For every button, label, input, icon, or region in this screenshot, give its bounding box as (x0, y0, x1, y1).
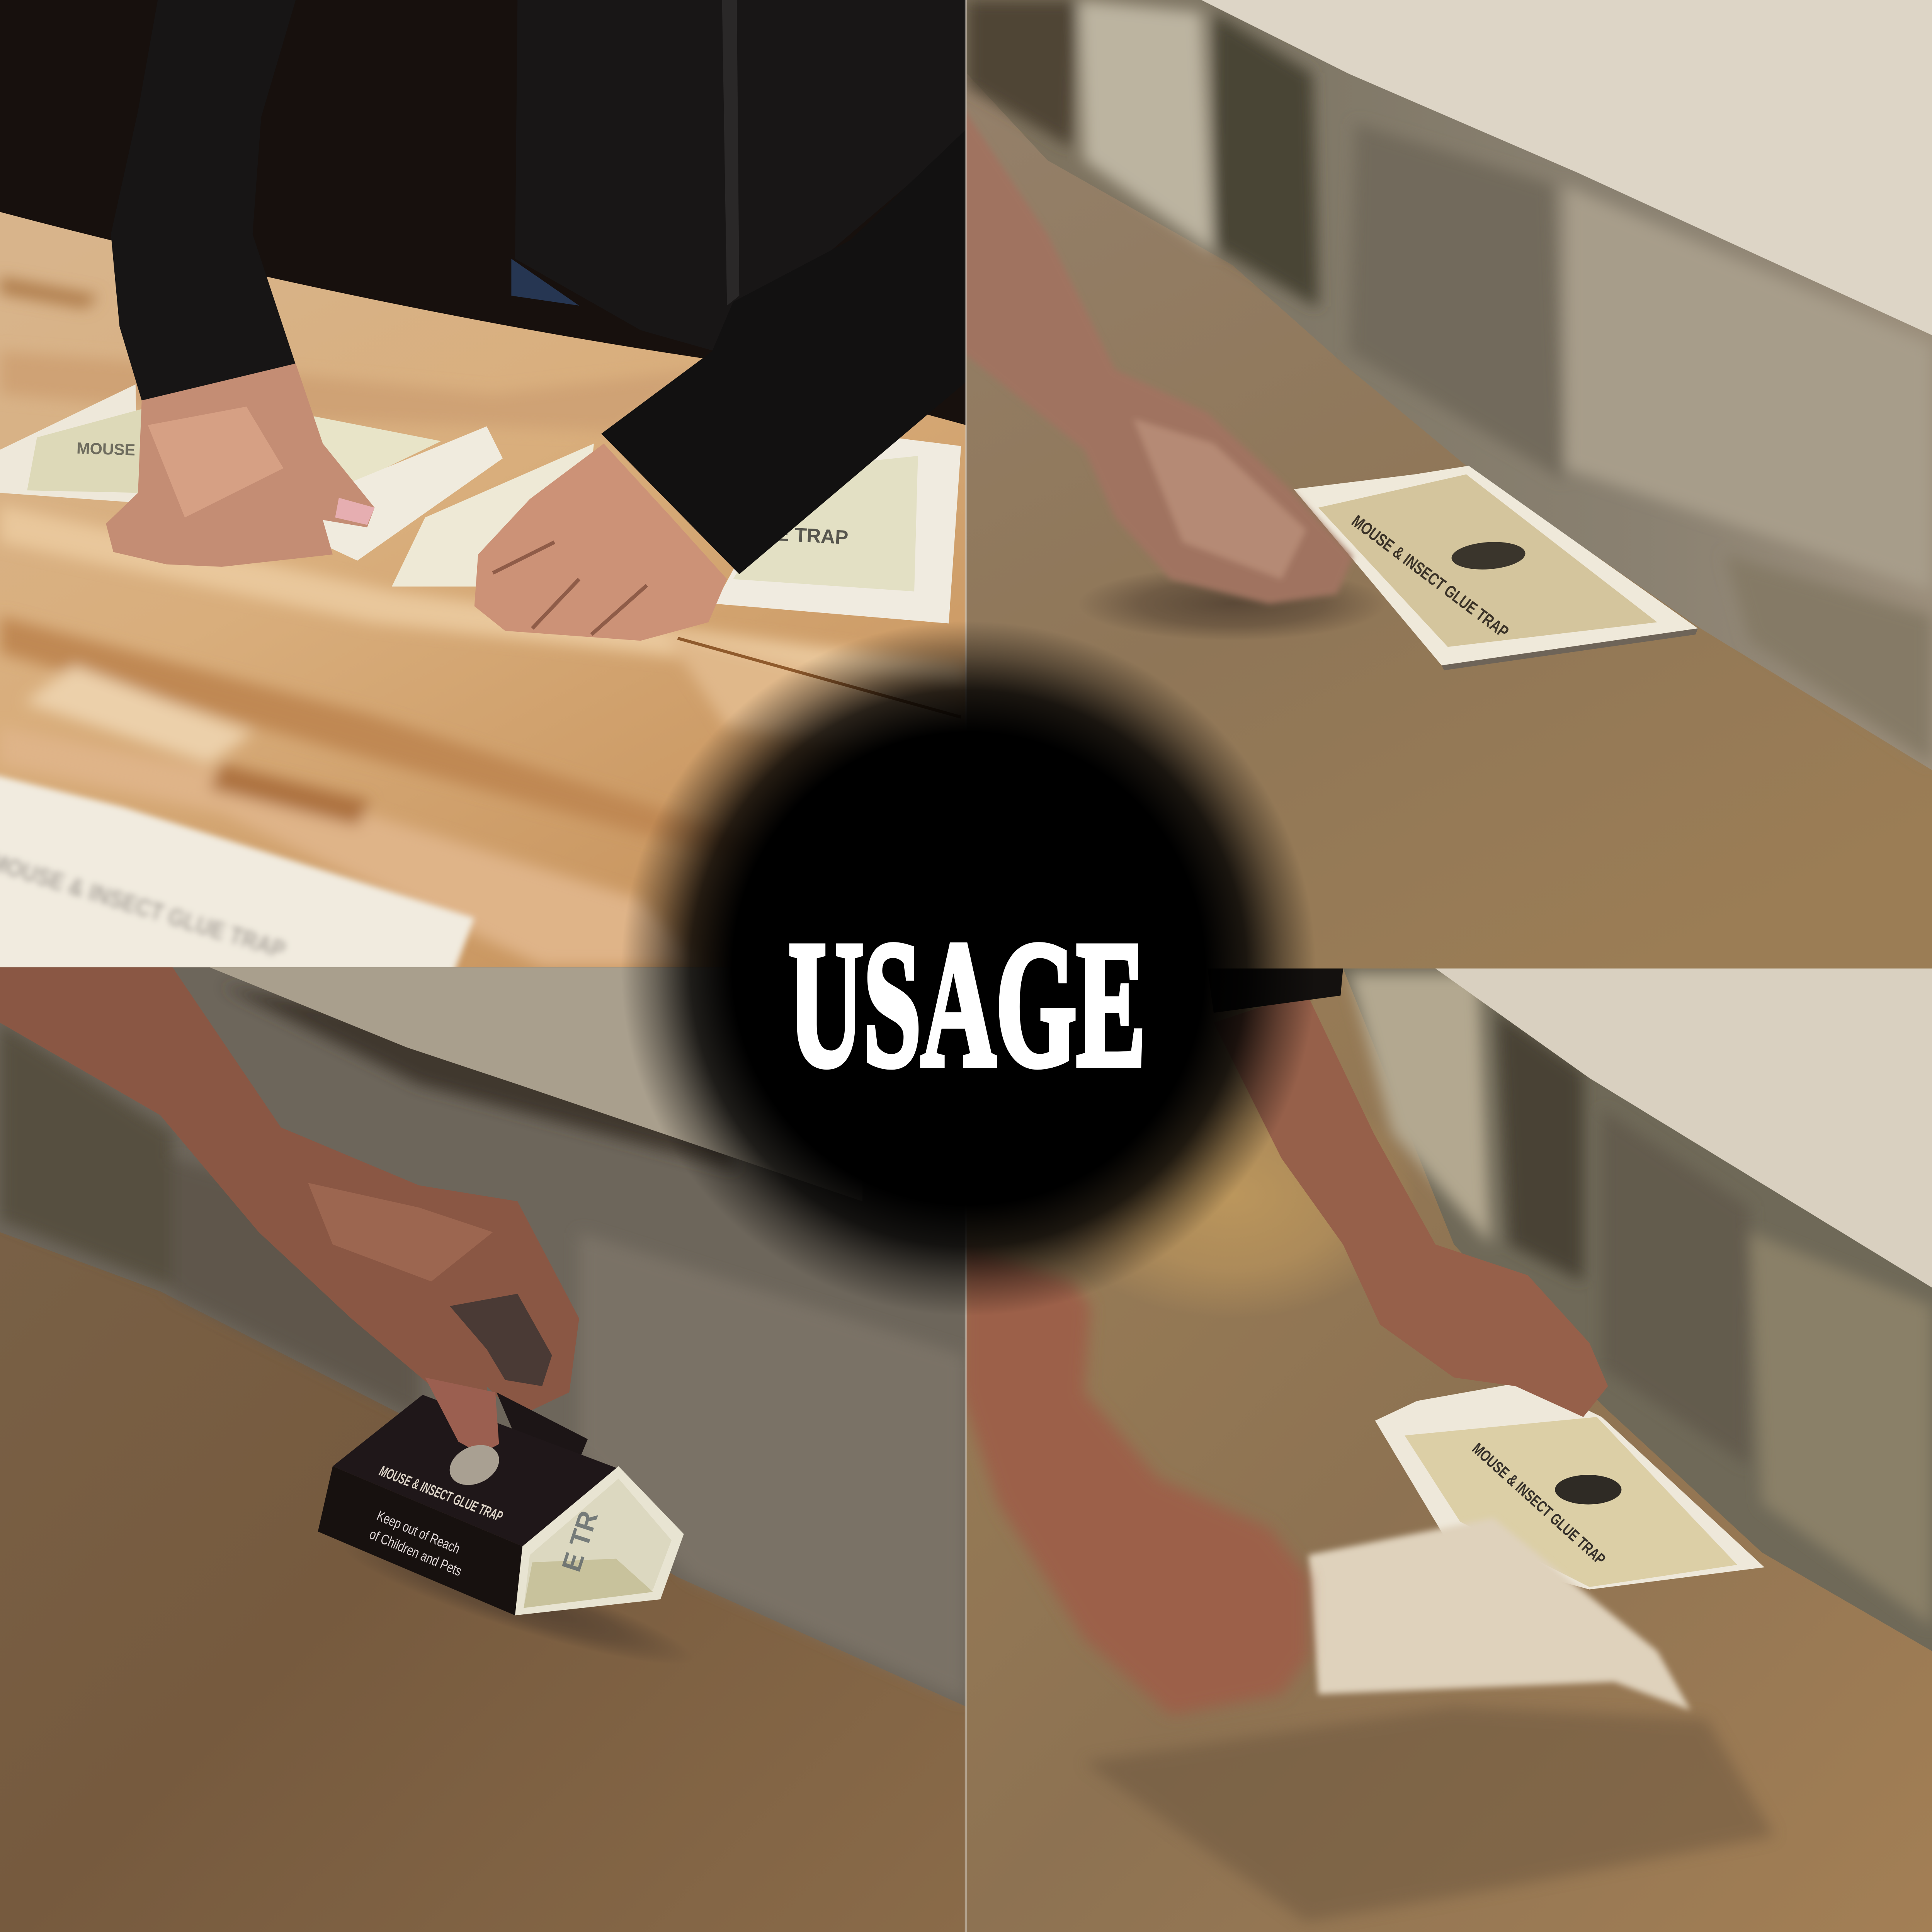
arm and hand (0, 967, 579, 1451)
box warning line two: of Children and Pets (367, 1526, 464, 1579)
long floor shadow (1084, 1706, 1774, 1922)
floor shadow (333, 1519, 702, 1685)
painted wall upper (1435, 968, 1932, 1287)
concrete block tones (967, 0, 1932, 764)
paper trap left (0, 384, 503, 561)
paper foreground (0, 774, 474, 973)
hands (106, 364, 727, 641)
wood grain (0, 277, 966, 966)
thumb (425, 1378, 499, 1454)
logo (1555, 1475, 1621, 1504)
glue trap on floor (1294, 466, 1698, 670)
paper trap right: UE TRAP (761, 522, 849, 548)
background room (0, 0, 966, 425)
panel: folding traps on workbench (0, 0, 966, 973)
paper trap right (392, 434, 961, 624)
black sleeve (1208, 968, 1343, 1013)
hand and arm (961, 105, 1353, 604)
warm floor glow (1047, 1072, 1417, 1318)
blurred near arm (961, 1245, 1308, 1715)
panel: placing trap along wall (961, 0, 1932, 970)
box warning line one: Keep out of Reach (374, 1507, 463, 1557)
concrete wall (0, 967, 966, 1706)
folded trap box (318, 1378, 684, 1615)
divider line (965, 0, 967, 1932)
central black vignette (621, 621, 1316, 1316)
floor (966, 0, 1932, 970)
concrete block tones (0, 986, 965, 1701)
concrete wall (967, 0, 1932, 770)
table dark grain line (678, 638, 961, 717)
panel: folded box trap at wall (0, 967, 966, 1932)
inner print: E TR (556, 1507, 604, 1575)
concrete block tones (1349, 973, 1932, 1626)
concrete wall (1343, 968, 1932, 1651)
wooden table (0, 212, 966, 968)
logo (1451, 539, 1526, 572)
box logo (443, 1437, 506, 1493)
floor shadow (1078, 567, 1386, 641)
trap label: MOUSE & INSECT GLUE TRAP (1469, 1439, 1609, 1568)
title: USAGE (789, 905, 1146, 1104)
floor (966, 968, 1932, 1932)
arm and hand at wall (1214, 992, 1608, 1417)
painted wall upper (209, 967, 862, 1201)
trap with print (1375, 1381, 1764, 1590)
panel: peeling trap cover near wall (961, 968, 1932, 1932)
painted wall upper (1201, 0, 1932, 335)
box heading: MOUSE & INSECT GLUE TRAP (377, 1463, 505, 1525)
jacket and sleeves (111, 0, 966, 574)
paper trap left: MOUSE (76, 439, 136, 459)
cover sheet in hand (1308, 1518, 1690, 1710)
floor (0, 967, 966, 1932)
trap label: MOUSE & INSECT GLUE TRAP (1348, 512, 1512, 642)
